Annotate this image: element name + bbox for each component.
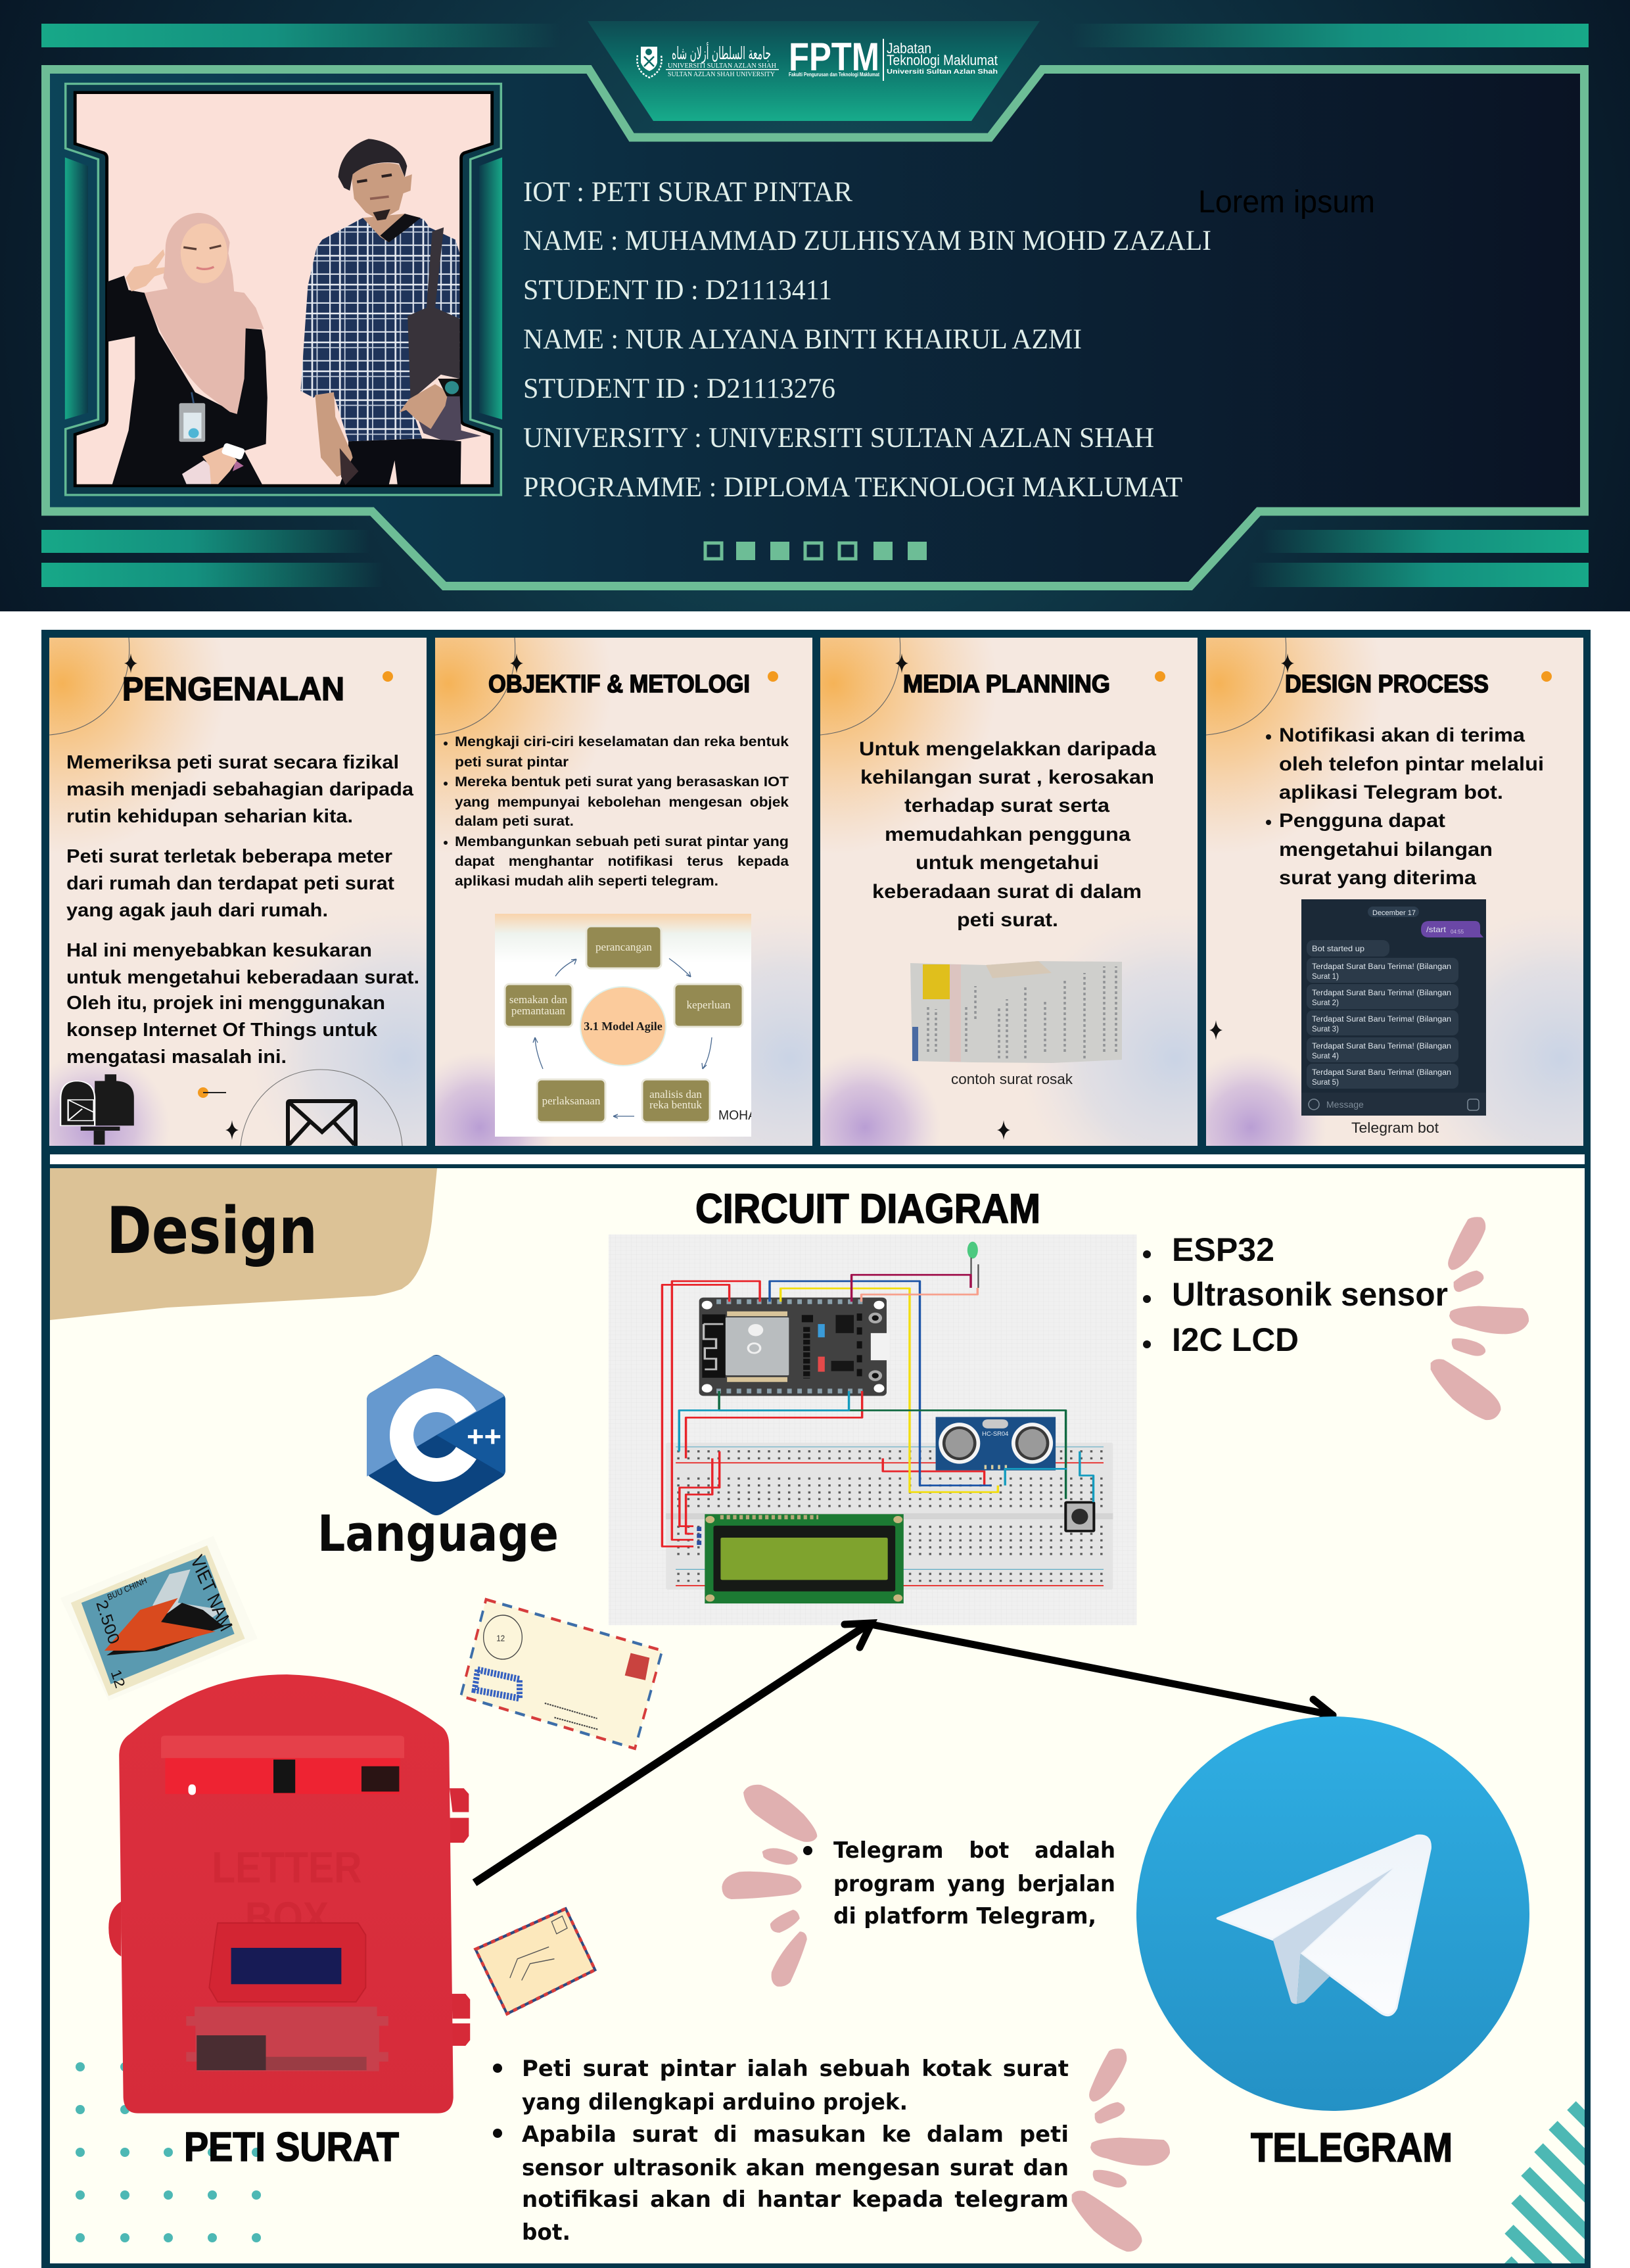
body text: Memeriksa peti surat secara fizikal [66,752,399,773]
body text: terhadap surat serta [904,795,1109,816]
body text: rutin kehidupan seharian kita. [66,806,353,827]
label: peti surat: PETI SURAT [184,2125,399,2170]
objectives list [444,734,789,889]
component list: ESP32 [1172,1231,1274,1268]
logo: university wordmark: UNIVERSITI SULTAN AZLAN SHAH [668,62,776,70]
telegram screenshot: Terdapat Surat Baru Terima! (Bilangan [1312,1016,1451,1024]
objectives list: Membangunkan sebuah peti surat pintar yang [455,834,789,849]
banner background [0,0,1630,611]
telegram screenshot: December 17 [1372,909,1416,917]
label: telegram: TELEGRAM [1251,2125,1453,2171]
objectives list: aplikasi mudah alih seperti telegram. [455,874,718,889]
body text: keberadaan surat di dalam [872,881,1142,903]
panel: design process [1055,513,1630,1210]
man [300,139,481,485]
label: language: Language [317,1504,559,1563]
ultrasonic sensor [936,1417,1056,1471]
telegram screenshot: Terdapat Surat Baru Terima! (Bilangan [1312,1069,1451,1077]
body text: peti surat. [957,909,1058,931]
objectives list: peti surat pintar [455,755,569,770]
logo: university wordmark: جامعة السلطان أزلان شاه [672,41,771,64]
logo: university crest [637,47,662,78]
red smart mailbox [108,1674,470,2114]
envelope: airmail large: 12 [496,1634,505,1643]
push button [1064,1501,1095,1532]
stage boxes [505,926,743,1122]
logo: university wordmark [666,41,779,78]
panel: media planning [669,513,1333,1210]
student details: IOT : PETI SURAT PINTAR [523,177,852,208]
heading: OBJEKTIF & METOLOGI [488,671,750,698]
decorative dots [76,2062,261,2242]
logo: FPTM: FPTM [789,35,879,79]
body text [66,752,419,1068]
objectives list: dalam peti surat. [455,814,574,829]
body text: mengatasi masalah ini. [66,1047,287,1068]
decorative splash: top right [1431,1217,1529,1420]
objectives list: Mereka bentuk peti surat yang berasaskan IOT [455,774,789,790]
heading: MEDIA PLANNING [903,671,1110,698]
arrow: mailbox to circuit [475,1623,872,1883]
photo frame [65,83,502,495]
placeholder text: Lorem ipsum [1198,185,1375,220]
telegram screenshot: Surat 2) [1312,999,1339,1007]
woman [107,213,268,485]
center circle [580,987,666,1066]
bullet list: oleh telefon pintar melalui [1279,753,1544,775]
description: telegram bot: program yang berjalan [833,1871,1115,1897]
stage labels [509,941,731,1111]
component list [1143,1231,1448,1358]
wires [662,1275,1094,1546]
postage stamp: VIET NAM [187,1552,236,1635]
body text: Hal ini menyebabkan kesukaran [66,940,372,961]
lower dark container [41,630,1591,2268]
logo: department name: Jabatan [887,40,931,57]
body text: Peti surat terletak beberapa meter [66,846,392,867]
footer bars [41,530,1589,587]
student details: UNIVERSITY : UNIVERSITI SULTAN AZLAN SHAH [523,423,1154,454]
postage stamp: 2.500 [93,1597,124,1647]
bullet list: surat yang diterima [1279,867,1476,889]
body text: kehilangan surat , kerosakan [860,767,1154,788]
component list: I2C LCD [1172,1321,1299,1358]
telegram screenshot: Surat 4) [1312,1052,1339,1060]
caption: contoh surat rosak [951,1071,1073,1087]
body text: untuk mengetahui keberadaan surat. [66,967,419,988]
icon: telegram logo [1136,1716,1529,2111]
body text: Oleh itu, projek ini menggunakan [66,993,385,1014]
decorative splash: lower [1072,2048,1170,2252]
postage stamp [60,1536,258,1701]
heading: circuit diagram: CIRCUIT DIAGRAM [695,1186,1040,1232]
telegram screenshot: Terdapat Surat Baru Terima! (Bilangan [1312,963,1451,971]
telegram screenshot: Surat 3) [1312,1026,1339,1033]
agile model diagram: MOHA [718,1108,757,1123]
heading: DESIGN PROCESS [1285,671,1489,698]
center circle: 3.1 Model Agile [584,1020,663,1033]
telegram screenshot: Surat 1) [1312,973,1339,981]
circuit diagram [609,1235,1137,1625]
photo of two students [75,93,492,486]
header bars top [41,24,1589,47]
stage labels: perlaksanaan [542,1095,601,1107]
stage labels: keperluan [686,999,731,1011]
envelope: airmail small [476,1908,595,2014]
icon: C++ logo: ++ [467,1421,501,1453]
description: telegram bot: di platform Telegram, [833,1903,1096,1929]
description: telegram bot [803,1837,1115,1929]
heading: PENGENALAN [122,671,344,707]
ESP32 board [699,1298,890,1396]
postage stamp: BUU CHINH [106,1575,148,1602]
objectives list: Mengkaji ciri-ciri keselamatan dan reka bentuk [455,734,789,749]
arrow: circuit to telegram [868,1624,1333,1725]
panel: pengenalan [0,513,562,1210]
cycle arrows [533,958,712,1118]
telegram screenshot: Bot started up [1312,944,1364,953]
telegram screenshot [1301,899,1486,1116]
description: mailbox: sensor ultrasonik akan mengesan surat dan [522,2155,1069,2181]
telegram screenshot: Surat 5) [1312,1079,1339,1087]
stage labels: perancangan [595,941,652,953]
icon: C++ logo [367,1355,505,1515]
stage labels: reka bentuk [649,1099,702,1111]
logo: department name: Universiti Sultan Azlan Shah [887,68,998,76]
header logo plate [588,21,1040,121]
pager squares [705,542,927,560]
telegram screenshot: /start [1426,925,1447,934]
description: telegram bot: Telegram bot adalah [833,1837,1115,1864]
description: mailbox: notifikasi akan di hantar kepada telegram [522,2186,1069,2213]
objectives list: dapat menghantar notifikasi terus kepada [455,854,789,869]
photo: damaged letter [910,961,1122,1063]
caption: Telegram bot [1351,1120,1439,1136]
ultrasonic sensor: HC-SR04 [982,1431,1009,1438]
heading: design [50,1168,437,1320]
decorative dot and line [198,1087,226,1098]
student details [523,177,1211,503]
agile model diagram [495,914,757,1137]
banner frame [46,70,1584,586]
student details: STUDENT ID : D21113276 [523,373,835,404]
body text: yang agak jauh dari rumah. [66,900,328,921]
student details: PROGRAMME : DIPLOMA TEKNOLOGI MAKLUMAT [523,472,1182,503]
stage labels: pemantauan [511,1004,566,1017]
student details: NAME : MUHAMMAD ZULHISYAM BIN MOHD ZAZALI [523,225,1211,256]
body text: memudahkan pengguna [885,824,1130,845]
description: mailbox: Peti surat pintar ialah sebuah kotak surat [522,2056,1069,2082]
student details: STUDENT ID : D21113411 [523,275,832,306]
body text: Untuk mengelakkan daripada [859,738,1156,760]
description: mailbox [493,2056,1069,2246]
bullet list [1266,724,1544,889]
LED [967,1242,978,1288]
panel: objektif dan metologi [435,638,812,1146]
telegram screenshot: Terdapat Surat Baru Terima! (Bilangan [1312,989,1451,997]
logo: university wordmark: SULTAN AZLAN SHAH UNIVERSITY [668,71,775,78]
heading: design: Design [106,1194,317,1269]
description: mailbox: Apabila surat di masukan ke dalam peti [522,2121,1069,2148]
bullet list: aplikasi Telegram bot. [1279,782,1503,803]
breadboard [666,1442,1113,1590]
telegram screenshot: 04:55 [1451,929,1464,935]
student details: NAME : NUR ALYANA BINTI KHAIRUL AZMI [523,324,1082,355]
red smart mailbox: BOX [245,1893,329,1943]
body text: untuk mengetahui [916,852,1099,874]
icon: mailbox [60,1074,134,1145]
logo: FPTM: Fakulti Pengurusan dan Teknologi Maklumat [789,72,879,78]
telegram screenshot: Terdapat Surat Baru Terima! (Bilangan [1312,1043,1451,1051]
bullet list: mengetahui bilangan [1279,839,1493,861]
body text [859,738,1156,931]
objectives list: yang mempunyai kebolehan mengesan objek [455,795,789,810]
envelope: airmail large [461,1599,662,1749]
logo: department name: Teknologi Maklumat [887,52,998,68]
stage labels: semakan dan [509,993,568,1006]
bullet list: Pengguna dapat [1279,810,1445,832]
component list: Ultrasonik sensor [1172,1276,1448,1313]
stage labels: analisis dan [649,1088,702,1100]
body text: konsep Internet Of Things untuk [66,1020,378,1041]
postage stamp: 12 [108,1667,128,1690]
decorative stripes [1507,2106,1591,2267]
description: mailbox: bot. [522,2219,570,2246]
body text: dari rumah dan terdapat peti surat [66,873,394,894]
logo: department name [887,40,998,76]
icon: envelope [288,1101,356,1146]
telegram screenshot: Message [1326,1099,1364,1110]
panel: design [50,1168,1591,2267]
description: mailbox: yang dilengkapi arduino projek. [522,2089,908,2115]
red smart mailbox: LETTER [212,1843,362,1892]
decorative splash: middle [722,1785,817,1987]
bullet list: Notifikasi akan di terima [1279,724,1525,746]
LCD [699,1514,904,1603]
body text: masih menjadi sebahagian daripada [66,779,414,800]
